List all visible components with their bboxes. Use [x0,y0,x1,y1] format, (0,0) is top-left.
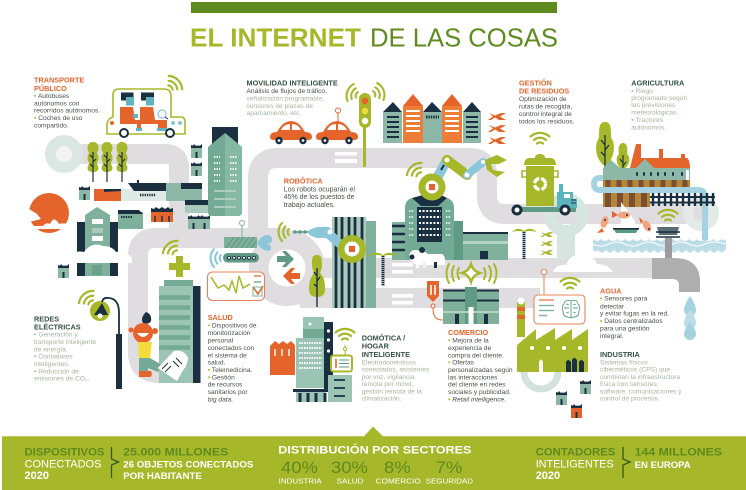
icon: health cross [169,256,190,277]
text: comercio: Retail intelligence. [452,397,506,404]
icon: fish [597,211,653,233]
tower [208,127,242,216]
text: redes electricas: emisiones de CO₂. [34,376,90,383]
text: domotica: INTELIGENTE [362,350,410,359]
icon: comercio diamond with signal [446,264,496,283]
city buildings top [383,94,481,143]
text: gestion de residuos: todos los residuos. [519,118,575,125]
text: movilidad inteligente: señalización programable, [246,96,324,102]
text: movilidad inteligente: Análisis de flujos de tráfico, [246,88,327,95]
stat: distribucion por sectores: 7% [436,459,463,477]
text: redes electricas: ELÉCTRICAS [34,322,81,331]
stat: contadores inteligentes: CONTADORES [536,447,615,459]
text: industria: INDUSTRIA [600,350,640,359]
text: domotica: gestión remota de la [362,388,422,395]
icon: green plants [540,232,553,255]
text: gestion de residuos: Optimización de [519,96,567,103]
icon: water drops [684,296,696,340]
text: agricultura: autónomos. [631,124,666,132]
stat: dispositivos conectados: CONECTADOS [24,459,102,471]
icon: router [223,220,272,262]
farm building [603,144,690,207]
icon: cars [270,108,358,143]
striped building [332,217,376,308]
text: salud: Dispositivos de [212,323,257,330]
text: comercio: COMERCIO [448,328,488,337]
small buildings [118,207,173,229]
text: industria: Sistemas físicos [600,359,649,366]
text: agricultura: meteorológicas. [631,110,678,117]
text: robotica: trabajo actuales. [284,202,335,209]
text: movilidad inteligente: sensores de plazas de [246,103,313,110]
stat: distribucion por sectores [278,444,473,486]
text: industria: física con sensores, [600,381,659,388]
icon: palm left [368,253,397,286]
icon: autonomous bus [107,89,185,137]
text: salud: Gestión [212,374,235,381]
text: robotica: ROBÓTICA [284,177,323,186]
text: redes electricas [34,314,96,383]
stat: dispositivos conectados: 25.000 MILLONES [123,447,228,459]
factory building centre [392,174,508,260]
text: domotica: Electrodomésticos [362,359,417,366]
text: gestion de residuos: rutas de recogida, [519,104,572,111]
text: transporte publico: autónomos con [34,100,80,107]
text: transporte publico: recorridos autónomos. [34,108,100,115]
houses group left [79,144,210,229]
text: salud: de recursos [208,382,243,389]
text: transporte publico: TRANSPORTE [34,76,84,85]
text: agua: integral. [600,333,624,340]
icon: truck [513,184,577,214]
icon: wifi factory [560,278,580,288]
text: domotica: HOGAR [362,342,390,351]
text: redes electricas: ▪ Reducción de [34,368,79,375]
stat: dispositivos conectados: 2020 [24,470,49,482]
text: salud [208,313,257,404]
text: salud: conectados con [208,345,255,352]
text: robotica: 45% de los puestos de [284,194,355,201]
text: redes electricas: ▪ Generación y [34,332,78,339]
text: comercio: ▪ [448,360,452,367]
icon: wifi robot hand [279,223,289,241]
text: salud: el sistema de [208,352,247,359]
building with cloud [72,207,132,276]
text: redes electricas: ▪ Contadores [34,354,73,361]
farm trees [596,122,629,180]
stat: distribucion por sectores: COMERCIO [376,479,421,486]
text: domotica: climatización. [362,396,402,403]
text: agricultura: ▪ Riego [631,88,653,95]
text: agua [600,286,669,340]
small house [58,264,69,278]
stat: dispositivos conectados: POR HABITANTE [123,471,202,481]
text: salud: ▪ [208,323,212,330]
text: transporte publico: PÚBLICO [34,84,67,93]
text: salud: ▪ [208,367,212,374]
icon: orange plants [488,113,506,144]
text: domotica: remota por móvil, [362,381,413,388]
robot arm lower [293,227,366,263]
text: domotica [362,333,430,403]
text: industria [600,350,682,403]
text: robotica: Los robots ocuparán el [284,186,355,193]
title: EL INTERNET [190,23,361,53]
domotica building [270,317,352,402]
icon: price tag [427,281,452,322]
text: transporte publico: compartido. [34,123,69,130]
stat: dispositivos conectados [24,447,253,482]
icon: cow [409,247,445,268]
text: agricultura: ▪ Tractores [631,117,664,124]
stat: contadores inteligentes: 144 MILLONES [635,447,722,459]
robot arm upper [432,155,507,187]
stat: contadores inteligentes: 2020 [536,470,560,482]
icon: trees top left [88,142,128,182]
text: gestion de residuos [519,78,575,125]
text: comercio: experiencia de [448,345,492,352]
icon: brain device [534,269,585,324]
stat: dispositivos conectados: 26 OBJETOS CONECTADOS [123,460,253,470]
icon: factory [517,298,588,372]
stat: distribucion por sectores: DISTRIBUCIÓN POR SECTORES [278,444,471,457]
text: transporte publico [34,76,100,130]
blue water pipe [594,178,705,240]
stat: distribucion por sectores: INDUSTRIA [279,479,322,486]
text: agua: Datos centralizados [604,318,663,325]
stat: distribucion por sectores: SEGURIDAD [426,479,473,486]
stat: distribucion por sectores: SALUD [337,479,363,486]
text: movilidad inteligente [246,78,338,117]
text: salud: Telemedicina. [212,367,253,374]
text: salud: big data. [208,397,233,404]
text: agua: para una gestión [600,326,650,333]
text: comercio: del cliente en redes [448,382,506,389]
stat: dispositivos conectados: DISPOSITIVOS [24,447,104,459]
text: salud: personal [208,338,234,345]
water waves [593,239,726,252]
icon: wifi traffic light left [344,83,360,103]
icon: palm right [512,229,537,259]
text: comercio: ▪ [448,397,452,404]
text: transporte publico: Coches de uso [38,115,83,122]
text: agricultura: programado según [631,95,687,102]
small houses bottom right [556,380,591,418]
text: redes electricas: inteligentes. [34,361,70,368]
icon: sailboat [613,202,639,233]
text: agricultura: AGRICULTURA [631,78,685,87]
icon: orange sun with cloud [28,193,70,233]
icon: wifi router [211,249,221,267]
fence [650,193,715,206]
icon: monitor chart [208,272,264,300]
text: salud: salud. [208,360,226,367]
text: agricultura [631,78,687,132]
shop building [443,287,499,324]
title: DE LAS COSAS [370,23,558,53]
stat: distribucion por sectores: 30% [331,459,368,477]
icon: exchange arrows [268,250,306,286]
text: comercio: las interacciones [448,374,498,381]
text: gestion de residuos: DE RESIDUOS [519,87,569,96]
text: industria: control de procesos. [600,396,660,403]
faucet and pipe [652,227,700,292]
text: comercio: sociales y publicidad. [448,389,511,396]
icon: traffic light [359,93,371,167]
icon: wifi bus [164,73,185,94]
bottom statistics band [2,426,746,490]
icon: trash bin [522,133,558,206]
text: salud: monitorización [208,330,251,337]
text: agua: y evitar fugas en la red. [600,311,669,318]
text: salud: ▪ [208,374,212,381]
text: comercio: personalizadas según [448,367,513,374]
text: movilidad inteligente: aparcamiento, etc. [246,110,301,117]
text: domotica: conectados, asistentes [362,366,430,374]
icon: smart home device [331,345,352,372]
text: movilidad inteligente: MOVILIDAD INTELIGENTE [246,78,338,87]
icon: wifi traffic light right [371,82,387,102]
text: agua: ▪ [600,318,604,325]
text: comercio: compra del cliente. [448,352,504,359]
cloud near faucet [553,254,613,272]
icon: tree centre [309,255,325,307]
text: comercio: Mejora de la [452,337,489,344]
text: comercio: Ofertas [452,360,475,367]
text: industria: ciberméticos (CPS) que [600,366,670,374]
icon: wifi streetlamp [77,288,98,308]
text: domotica: DOMÓTICA / [362,333,405,342]
text: salud: SALUD [208,313,233,322]
stat: contadores inteligentes: EN EUROPA [635,460,691,470]
text: agua: detectar [600,303,625,310]
text: robotica [284,177,355,209]
road junction circles [45,135,714,389]
icon: wifi domotica [336,329,354,340]
text: comercio: ▪ [448,337,452,344]
person with foot cast [128,312,188,381]
icon: wifi hospital [161,238,182,258]
text: agua: Sensores para [604,296,648,303]
text: agricultura: las previsiones [631,102,676,109]
text: industria: software, comunicaciones y [600,388,682,395]
text: salud: sanitarios por [208,389,248,396]
text: transporte publico: ▪ [34,115,38,122]
text: redes electricas: REDES [34,314,59,323]
text: industria: combinan la infraestructura [600,374,680,381]
icon: wifi robot arm [405,160,426,180]
icon: wifi water [658,210,678,220]
text: gestion de residuos: GESTIÓN [519,78,552,87]
road network [64,152,710,373]
stat: contadores inteligentes: INTELIGENTES [536,459,614,471]
text: transporte publico: Autobuses [38,93,70,100]
title [190,23,558,53]
stat: distribucion por sectores: 40% [281,459,318,477]
icon: streetlamp [90,298,122,389]
text: transporte publico: ▪ [34,93,38,100]
title banner bar [191,2,557,13]
text: domotica: por voz, vigilancia [362,374,415,381]
text: redes electricas: de energía. [34,346,68,353]
text: agua: AGUA [600,286,622,295]
stat: contadores inteligentes [536,447,722,482]
stat: distribucion por sectores: 8% [384,459,411,477]
hospital building [159,280,200,383]
text: redes electricas: transporte inteligente [34,339,96,346]
text: gestion de residuos: control integral de [519,111,572,118]
text: agua: ▪ [600,296,604,303]
text: comercio [448,328,513,404]
